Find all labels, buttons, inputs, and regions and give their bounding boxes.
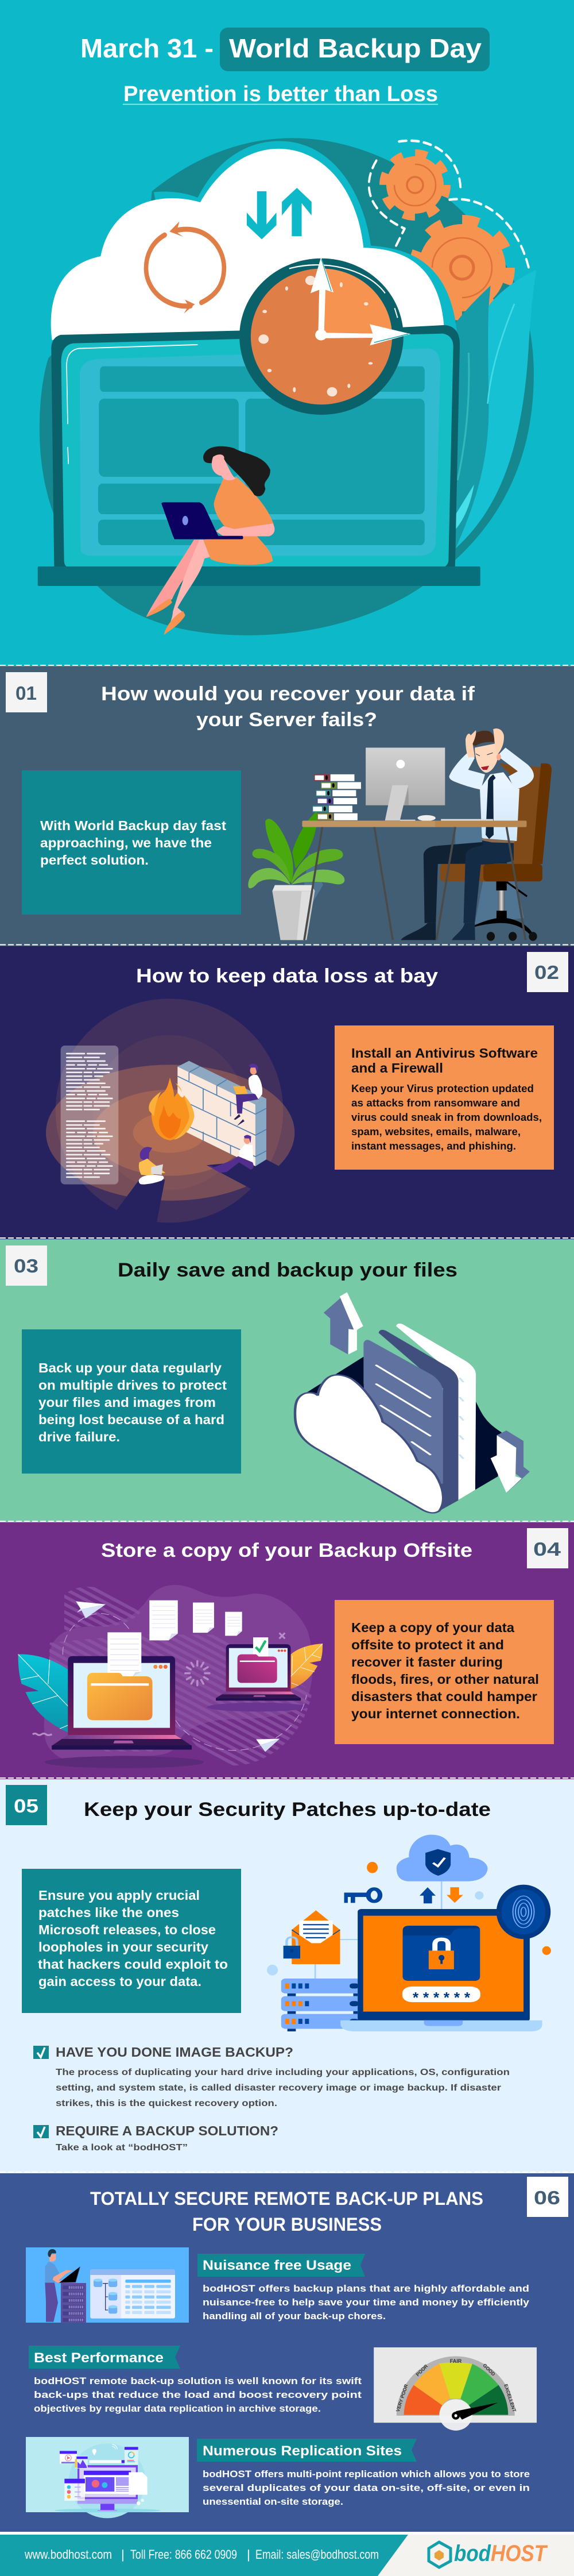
heading: How would you recover your data if — [101, 683, 475, 705]
icon: transfer arrows — [247, 188, 312, 239]
icon: server stack — [281, 1979, 360, 2031]
person with tablet — [139, 1147, 165, 1185]
video window — [60, 2451, 77, 2463]
heading: TOTALLY SECURE REMOTE BACK-UP PLANS — [90, 2188, 483, 2209]
background blob — [44, 1585, 313, 1768]
desk, monitor and binders — [302, 747, 526, 940]
icon: gears — [383, 153, 509, 315]
person seated below wall — [207, 1135, 254, 1173]
document — [129, 2472, 148, 2495]
number badge 02: 02 — [534, 962, 559, 983]
server rack — [61, 2283, 86, 2323]
number badge 03: 03 — [14, 1255, 38, 1277]
title: March 31 - — [80, 33, 214, 63]
callout box: Keep your Virus protection updated — [351, 1083, 534, 1094]
logo: bodHOST — [429, 2541, 548, 2567]
person — [45, 2249, 80, 2322]
callout box: approaching, we have the — [40, 835, 212, 850]
large laptop with folder — [52, 1632, 192, 1750]
contact details: www.bodhost.com — [24, 2547, 112, 2562]
callout box: patches like the ones — [38, 1905, 179, 1920]
number badge 05: 05 — [14, 1795, 38, 1817]
icon: fingerprint — [497, 1885, 550, 1939]
gauge chart: EXCELLENT — [503, 2383, 518, 2413]
analytics card — [125, 2447, 138, 2465]
text: Best Performance: objectives by regular data replication in archive storage. — [34, 2403, 321, 2414]
callout box — [335, 1600, 554, 1744]
icon: up arrow — [324, 1292, 363, 1354]
heading: FOR YOUR BUSINESS — [192, 2214, 382, 2235]
section 05: security patches — [0, 1779, 574, 2173]
icon: key — [344, 1889, 380, 1903]
title — [80, 28, 490, 71]
contact details: Email: sales@bodhost.com — [255, 2547, 379, 2562]
plant — [248, 811, 344, 940]
text: Nuisance free Usage: bodHOST offers backup plans that are highly affordable and — [203, 2283, 529, 2294]
callout box: as attacks from ransomware and — [351, 1097, 520, 1109]
callout box — [22, 770, 241, 915]
gauge chart: FAIR — [450, 2358, 462, 2364]
ribbon: Numerous Replication Sites: Numerous Replication Sites — [203, 2443, 402, 2459]
illustration: blob background — [40, 138, 534, 635]
callout box: drive failure. — [38, 1429, 120, 1444]
callout box: loopholes in your security — [38, 1939, 208, 1954]
callout box — [335, 1025, 554, 1170]
database table — [90, 2269, 175, 2319]
callout box: virus could sneak in from downloads, — [351, 1112, 542, 1123]
illustration: replication dashboard — [26, 2437, 189, 2518]
monitor — [77, 2465, 138, 2511]
laptop screen — [51, 325, 460, 567]
callout box: Microsoft releases, to close — [38, 1922, 216, 1937]
cloud — [295, 1375, 443, 1513]
number badge 06 — [527, 2177, 568, 2217]
person on wall — [233, 1064, 262, 1126]
text: Best Performance: back-ups that reduce the load and boost recovery point — [34, 2389, 362, 2400]
callout box: perfect solution. — [40, 853, 149, 867]
callout box: your internet connection. — [351, 1706, 520, 1721]
section 04: offsite copy — [0, 1522, 574, 1779]
callout box: being lost because of a hard — [38, 1412, 224, 1427]
heading: Store a copy of your Backup Offsite — [101, 1540, 472, 1561]
woman with laptop — [146, 446, 274, 635]
callout box: spam, websites, emails, malware, — [351, 1126, 521, 1137]
section 03: daily backup — [0, 1239, 574, 1522]
checklist item: image backup: HAVE YOU DONE IMAGE BACKUP? — [56, 2045, 293, 2060]
gauge chart: VERY POOR — [395, 2384, 409, 2412]
callout box: Ensure you apply crucial — [38, 1888, 200, 1903]
small gears — [137, 2499, 144, 2505]
checklist item: image backup: setting, and system state, is called disaster recovery image or image backup. If disaster — [56, 2083, 501, 2093]
text: Numerous Replication Sites: several duplicates of your data on-site, off-site, or even in — [203, 2482, 530, 2493]
spinner — [185, 1661, 210, 1686]
illustration: secure laptop — [267, 1835, 551, 2031]
illustration: fire and firewall — [46, 998, 294, 1227]
decorative dots — [267, 1862, 551, 1976]
number badge 05 — [6, 1785, 47, 1825]
section 01: server fails — [0, 666, 574, 946]
callout box: that hackers could exploit to — [38, 1957, 228, 1972]
footer — [0, 2532, 574, 2576]
flame — [149, 1078, 194, 1140]
illustration: stressed man at desk — [248, 728, 552, 941]
number badge 02 — [527, 952, 568, 992]
callout box: Back up your data regularly — [38, 1360, 222, 1375]
checklist item: image backup — [33, 2045, 510, 2108]
callout box: With World Backup day fast — [40, 818, 226, 833]
number badge 06: 06 — [534, 2187, 560, 2208]
chart window — [75, 2456, 88, 2469]
callout box: your files and images from — [38, 1395, 216, 1410]
callout box: offsite to protect it and — [351, 1637, 504, 1652]
ribbon: Nuisance free Usage: Nuisance free Usage — [203, 2258, 351, 2273]
checklist item: backup solution: REQUIRE A BACKUP SOLUTION? — [56, 2123, 278, 2138]
ribbon: Numerous Replication Sites — [197, 2439, 417, 2462]
title: World Backup Day — [229, 33, 482, 63]
text: Nuisance free Usage — [203, 2283, 530, 2322]
logo: bodHOST: HOST — [491, 2541, 548, 2566]
text: Numerous Replication Sites — [203, 2469, 530, 2507]
contact details: Toll Free: 866 662 0909 — [130, 2547, 237, 2562]
man — [401, 728, 534, 940]
laptop base — [38, 566, 480, 586]
number badge 01 — [6, 672, 47, 712]
callout box: recover it faster during — [351, 1655, 503, 1669]
laptop — [340, 1909, 542, 2031]
text: Best Performance: bodHOST remote back-up solution is well known for its swift — [34, 2376, 362, 2386]
illustration: cloud with files — [295, 1292, 530, 1513]
heading — [90, 2188, 483, 2235]
heading: your Server fails? — [196, 709, 377, 731]
heading: Keep your Security Patches up-to-date — [84, 1799, 491, 1821]
heading — [101, 683, 475, 731]
section 02: data loss — [0, 946, 574, 1239]
callout box — [22, 1329, 241, 1474]
ribbon: Best Performance — [29, 2346, 180, 2369]
icon: sync arrows — [146, 221, 224, 314]
callout box: floods, fires, or other natural — [351, 1672, 539, 1687]
small laptop with folder — [216, 1637, 301, 1700]
callout box: gain access to your data. — [38, 1974, 201, 1989]
icon: transfer arrows — [420, 1887, 463, 1903]
cloud — [51, 141, 457, 340]
text: Nuisance free Usage: handling all of your back-up chores. — [203, 2311, 386, 2322]
files — [363, 1324, 476, 1510]
search bar — [90, 2460, 126, 2463]
leaves — [445, 270, 536, 548]
callout box: Install an Antivirus Software — [351, 1046, 538, 1061]
ribbon: Nuisance free Usage — [197, 2254, 365, 2277]
flying documents — [149, 1601, 242, 1640]
checklist item: backup solution — [33, 2123, 278, 2153]
callout box: on multiple drives to protect — [38, 1378, 227, 1393]
leaves — [18, 1644, 323, 1733]
callout box: instant messages, and phishing. — [351, 1140, 516, 1152]
icon: down arrow — [491, 1430, 530, 1493]
gauge chart: POOR — [414, 2363, 429, 2377]
icon: clock — [239, 257, 411, 415]
section 06: remote backup plans — [0, 2173, 574, 2532]
contact details: | — [247, 2547, 250, 2562]
password stars: ****** — [413, 1989, 471, 2006]
logo: bodHOST: bod — [454, 2541, 491, 2566]
callout box — [22, 1869, 241, 2013]
callout box: disasters that could hamper — [351, 1689, 537, 1704]
icon: paper planes — [76, 1601, 280, 1752]
contact details: | — [121, 2547, 125, 2562]
text: Numerous Replication Sites: bodHOST offers multi-point replication which allows you to store — [203, 2469, 530, 2479]
text: Nuisance free Usage: nuisance-free to help save your time and money by efficiently — [203, 2297, 530, 2308]
text: Best Performance — [34, 2376, 362, 2414]
illustration: cloud, laptop and clock — [38, 141, 536, 635]
illustration: laptops syncing folders — [18, 1585, 323, 1768]
callout box: Keep a copy of your data — [351, 1620, 514, 1635]
list panel — [64, 2479, 85, 2501]
gauge chart: GOOD — [482, 2362, 497, 2377]
glow rings — [46, 998, 294, 1223]
contact details — [24, 2547, 379, 2562]
firewall — [177, 1061, 266, 1166]
number badge 04: 04 — [533, 1538, 561, 1560]
number badge 04 — [527, 1528, 568, 1568]
ribbon: Best Performance: Best Performance — [34, 2350, 164, 2366]
dashed orbit lines — [369, 141, 530, 272]
gauge chart — [374, 2347, 537, 2431]
checklist item: image backup: The process of duplicating your hard drive including your applications, OS, configuration — [56, 2068, 510, 2077]
icon: cloud with shield — [397, 1835, 488, 1881]
checklist item: image backup: strikes, this is the quickest recovery option. — [56, 2099, 277, 2108]
chair — [440, 763, 552, 941]
text: Numerous Replication Sites: unessential on-site storage. — [203, 2496, 343, 2507]
checklist item: backup solution: Take a look at “bodHOST” — [56, 2143, 188, 2153]
heading: Daily save and backup your files — [118, 1259, 457, 1281]
code panel — [61, 1046, 118, 1185]
callout box: and a Firewall — [351, 1061, 443, 1075]
main window — [84, 2471, 131, 2494]
small marks — [33, 1633, 285, 1735]
illustration: database management — [26, 2247, 189, 2323]
icon: map pin and wifi — [92, 2444, 117, 2455]
icon: envelope with lock — [284, 1910, 340, 1964]
number badge 03 — [6, 1245, 47, 1286]
number badge 01: 01 — [15, 682, 37, 704]
section: hero — [0, 0, 574, 666]
heading: How to keep data loss at bay — [136, 965, 438, 987]
subtitle: Prevention is better than Loss — [123, 82, 438, 106]
